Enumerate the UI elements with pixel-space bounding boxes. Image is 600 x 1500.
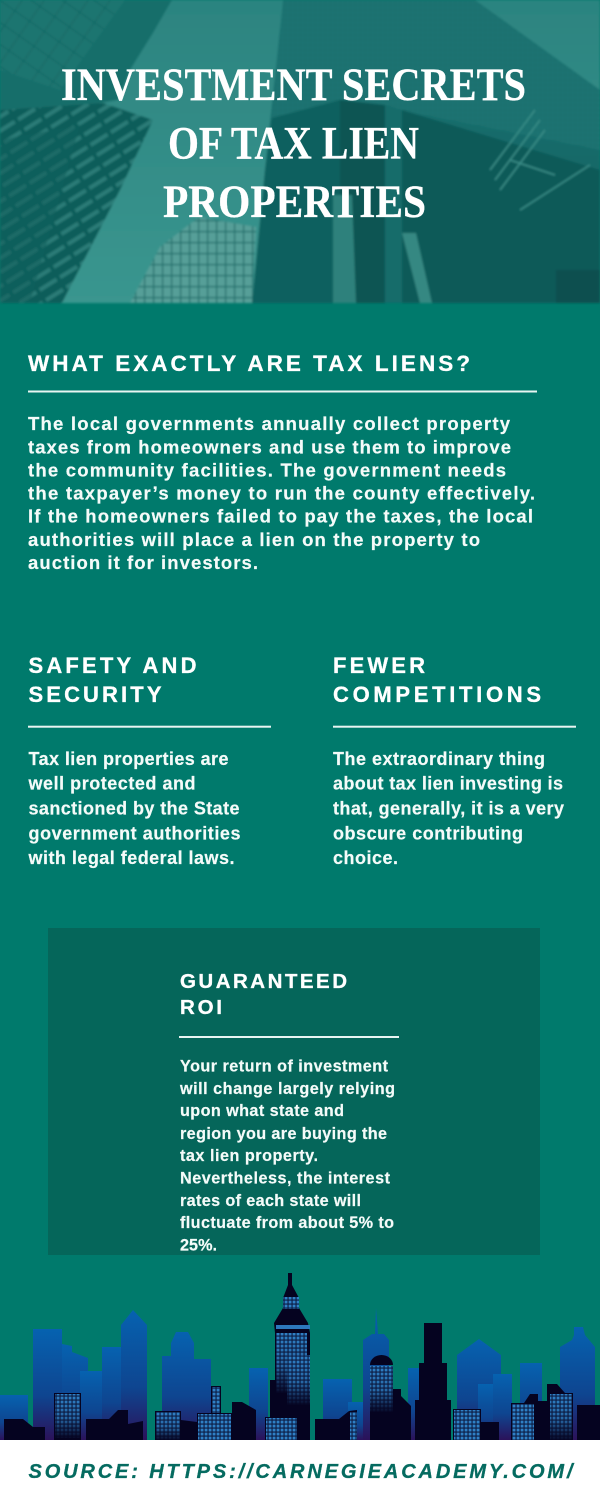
body text: 25%.	[180, 1237, 217, 1255]
body text: government authorities	[28, 823, 240, 843]
body text	[28, 749, 240, 868]
back row of blue buildings	[0, 1308, 595, 1440]
body text: fluctuate from about 5% to	[180, 1214, 394, 1232]
body text: taxes from homeowners and use them to improve	[28, 436, 511, 457]
body text: obscure contributing	[333, 823, 523, 843]
heading: fewer competitions: FEWER	[333, 653, 425, 678]
central clock tower	[270, 1273, 310, 1440]
domed tower	[370, 1355, 393, 1412]
heading: guaranteed ROI: ROI	[180, 996, 222, 1019]
body text: sanctioned by the State	[28, 799, 240, 819]
title: OF TAX LIEN	[168, 118, 419, 170]
footer band	[0, 1440, 600, 1500]
body text: choice.	[333, 848, 398, 868]
heading: safety and security: SAFETY AND	[28, 653, 196, 678]
body text: The extraordinary thing	[333, 749, 545, 769]
heading: fewer competitions	[333, 653, 541, 707]
body text: Nevertheless, the interest	[180, 1170, 391, 1188]
body text: that, generally, it is a very	[333, 799, 564, 819]
title: INVESTMENT SECRETS	[61, 59, 526, 111]
body text: authorities will place a lien on the property to	[28, 529, 480, 550]
body text: well protected and	[28, 774, 196, 794]
body text: will change largely relying	[179, 1080, 395, 1098]
body text	[28, 413, 535, 573]
body text	[333, 749, 564, 868]
panel: guaranteed ROI	[48, 928, 540, 1255]
body text: Tax lien properties are	[28, 749, 228, 769]
body text: tax lien property.	[180, 1147, 318, 1165]
body text: Your return of investment	[180, 1058, 389, 1076]
title: PROPERTIES	[163, 176, 426, 228]
section: fewer competitions	[333, 653, 576, 868]
source line: SOURCE: HTTPS://CARNEGIEACADEMY.COM/	[28, 1461, 575, 1483]
body text: with legal federal laws.	[28, 848, 234, 868]
hero photo: skyscrapers	[0, 0, 600, 303]
body text: about tax lien investing is	[333, 774, 563, 794]
heading: guaranteed ROI	[180, 970, 347, 1019]
section: what exactly are tax liens	[28, 351, 537, 573]
heading: what exactly are tax liens: WHAT EXACTLY ARE TAX LIENS?	[28, 351, 470, 376]
heading: safety and security	[28, 653, 196, 707]
heading: safety and security: SECURITY	[28, 682, 162, 707]
body text: upon what state and	[180, 1102, 344, 1120]
body text: auction it for investors.	[28, 552, 258, 573]
body text: rates of each state will	[180, 1192, 361, 1210]
section: safety and security	[28, 653, 271, 868]
front row of dark buildings	[4, 1323, 600, 1440]
body text	[179, 1058, 395, 1255]
body text: the taxpayer’s money to run the county effectively.	[28, 482, 535, 504]
city skyline illustration	[0, 1273, 600, 1440]
body text: The local governments annually collect property	[28, 413, 511, 434]
body text: If the homeowners failed to pay the taxes, the local	[28, 506, 533, 527]
heading: guaranteed ROI: GUARANTEED	[180, 970, 347, 993]
title	[61, 59, 526, 228]
body text: region you are buying the	[180, 1125, 387, 1143]
heading: fewer competitions: COMPETITIONS	[333, 682, 541, 707]
body text: the community facilities. The government needs	[28, 459, 506, 480]
lit window blocks	[55, 1387, 572, 1440]
